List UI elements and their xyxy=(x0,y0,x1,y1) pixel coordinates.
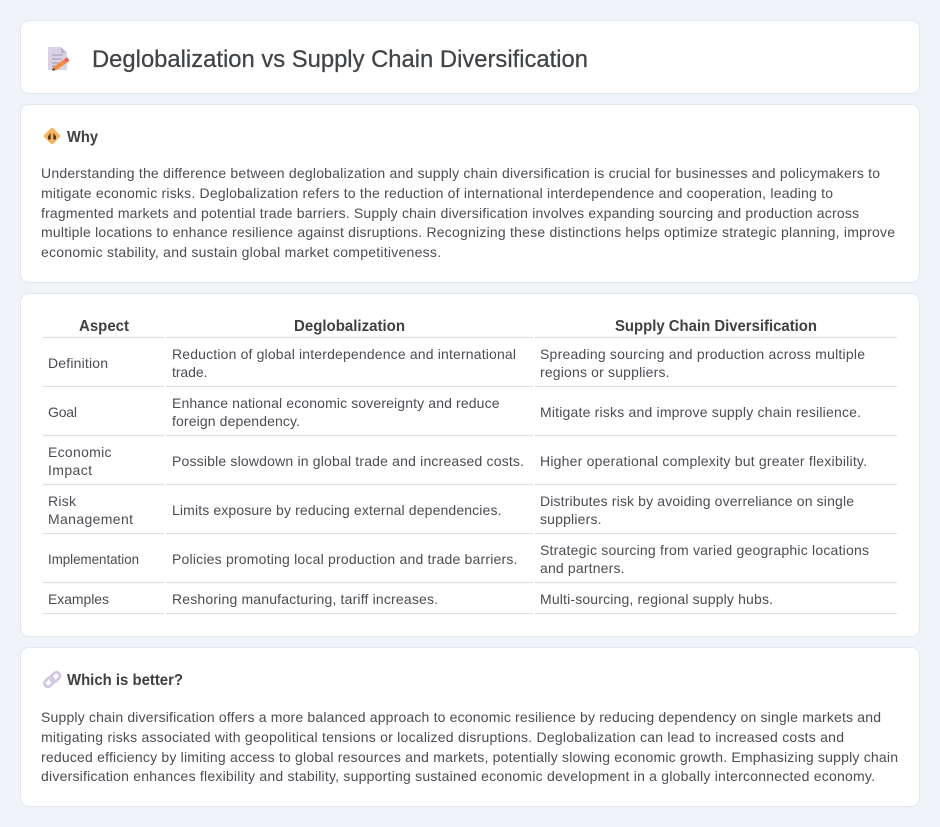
text block: why: Understanding the difference between deglobalization and supply chain diversification is crucial for businesses and policymakers to xyxy=(41,165,880,181)
icon: warning diamond xyxy=(43,127,61,145)
row: examples: Examples xyxy=(48,591,109,607)
row: implementation: Implementation xyxy=(48,551,139,567)
row: economic impact: Impact xyxy=(48,462,92,478)
row: risk management xyxy=(48,493,854,527)
row: examples: Reshoring manufacturing, tariff increases. xyxy=(172,591,438,607)
row: economic impact: Possible slowdown in global trade and increased costs. xyxy=(172,453,524,469)
panel: which is better xyxy=(20,648,920,806)
table header: Aspect xyxy=(79,318,130,335)
row: economic impact xyxy=(48,444,867,478)
text block: which is better xyxy=(41,709,898,784)
row: implementation: Strategic sourcing from varied geographic locations xyxy=(540,542,869,558)
row: definition: Reduction of global interdependence and international xyxy=(172,346,516,362)
row: definition: Definition xyxy=(48,355,108,371)
table header: Deglobalization xyxy=(294,318,405,335)
table header xyxy=(79,318,817,335)
row: risk management: Distributes risk by avoiding overreliance on single xyxy=(540,493,854,509)
row: definition: Spreading sourcing and production across multiple xyxy=(540,346,865,362)
row: risk management: Limits exposure by reducing external dependencies. xyxy=(172,502,502,518)
text block: why: economic stability, and sustain global market competitiveness. xyxy=(41,244,441,260)
row: definition xyxy=(48,346,865,380)
row: definition: regions or suppliers. xyxy=(540,364,670,380)
row: goal: Goal xyxy=(48,404,77,420)
row: economic impact: Higher operational complexity but greater flexibility. xyxy=(540,453,867,469)
row: goal xyxy=(48,395,861,429)
panel: why xyxy=(20,104,920,282)
text block: which is better: mitigating risks associated with geopolitical tensions or localized disruptions. Deglobalization can lead to increased costs and xyxy=(41,729,844,745)
row: goal: Mitigate risks and improve supply chain resilience. xyxy=(540,404,861,420)
icon: link xyxy=(43,671,61,688)
row: goal: foreign dependency. xyxy=(172,413,300,429)
row: implementation xyxy=(48,542,869,576)
text block: which is better: reduced efficiency by limiting access to global resources and markets, potentially slowing economic growth. Emphasizing supply chain xyxy=(41,749,898,765)
row: implementation: Policies promoting local production and trade barriers. xyxy=(172,551,518,567)
icon: document with pencil xyxy=(48,47,70,71)
text block: why: fragmented markets and potential trade barriers. Supply chain diversification involves expanding sourcing and production across xyxy=(41,205,859,221)
text block: why: multiple locations to enhance resilience against disruptions. Recognizing these distinctions helps optimize strategic planning, improve xyxy=(41,224,895,240)
row: risk management: Risk xyxy=(48,493,77,509)
row: goal: Enhance national economic sovereignty and reduce xyxy=(172,395,500,411)
text block: which is better: Supply chain diversification offers a more balanced approach to economic resilience by reducing dependency on single markets and xyxy=(41,709,881,725)
heading: which is better: Which is better? xyxy=(67,672,183,689)
row: implementation: and partners. xyxy=(540,560,624,576)
panel: comparison table xyxy=(20,294,920,636)
title: Deglobalization vs Supply Chain Diversification xyxy=(92,46,588,73)
heading: why: Why xyxy=(67,129,98,146)
row: definition: trade. xyxy=(172,364,208,380)
table header: Supply Chain Diversification xyxy=(615,318,817,335)
text block: why: mitigate economic risks. Deglobalization refers to the reduction of international interdependence and cooperation, leading to xyxy=(41,185,833,201)
row: risk management: Management xyxy=(48,511,133,527)
row: risk management: suppliers. xyxy=(540,511,602,527)
text block: why xyxy=(41,165,895,260)
text block: which is better: diversification enhances flexibility and stability, supporting sustained economic development in a globally interconnected economy. xyxy=(41,768,875,784)
row: economic impact: Economic xyxy=(48,444,112,460)
row: examples: Multi-sourcing, regional supply hubs. xyxy=(540,591,773,607)
header panel xyxy=(20,20,920,94)
row: examples xyxy=(48,591,773,607)
